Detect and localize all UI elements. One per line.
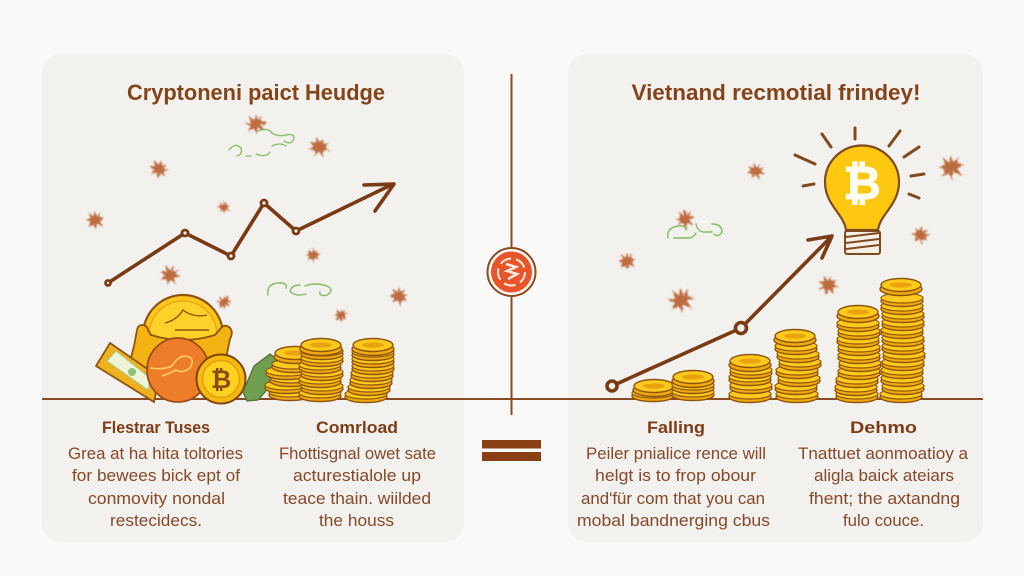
left coin stack 3 <box>345 338 394 402</box>
right coin stack 6 <box>880 278 925 402</box>
text block: left column 1: Flestrar Tuses <box>102 418 210 437</box>
large gold coin <box>131 295 232 375</box>
left trend line chart <box>106 184 394 286</box>
panel: right <box>568 54 983 542</box>
text block: right column 2: Dehmo <box>850 418 917 437</box>
icon: bitcoin light bulb <box>795 128 924 254</box>
text block: left column 1: restecidecs. <box>110 512 202 530</box>
right coin stack 4 <box>774 330 821 402</box>
text block: right column 2: fulo couce. <box>843 512 924 530</box>
text block: right column 2: Tnattuet aonmoatioy a <box>798 445 969 463</box>
banknote <box>96 343 159 402</box>
bitcoin coin: ₿ <box>211 366 231 394</box>
text block: left column 2 <box>279 418 436 530</box>
equals bars <box>482 440 541 461</box>
text block: right column 1: Falling <box>647 418 705 437</box>
text block: right column 1 <box>577 418 770 530</box>
text block: right column 1: and'für com that you can <box>581 490 765 508</box>
green banknote <box>243 354 287 401</box>
text block: right column 1: mobal bandnerging cbus <box>577 512 770 530</box>
text block: right column 2: fhent; the axtandng <box>809 490 960 508</box>
left coin stack 1 <box>265 346 316 400</box>
coin and banknote cluster <box>96 295 287 404</box>
green squiggle: right <box>668 224 722 238</box>
text block: left column 2: Fhottisgnal owet sate <box>279 445 436 463</box>
right coin stack 2 <box>672 370 714 400</box>
divider lines <box>42 74 983 415</box>
right coin stack 3 <box>729 354 772 402</box>
text block: left column 1: Grea at ha hita toltories <box>68 445 243 463</box>
decorative splatters: right <box>618 155 964 313</box>
text block: right column 2 <box>798 418 969 530</box>
text block: right column 1: helgt is to frop obour <box>595 467 757 485</box>
center emblem <box>488 248 536 296</box>
text block: right column 2: aligla baick ateiars <box>814 467 954 485</box>
panel: left <box>42 54 464 542</box>
text block: left column 2: acturestialole up <box>293 467 421 485</box>
right coin stack 5 <box>835 306 881 402</box>
right rising arrow <box>607 236 832 391</box>
bitcoin coin <box>196 354 246 404</box>
text block: left column 2: teace thain. wiilded <box>283 490 431 508</box>
text block: left column 1: conmovity nondal <box>88 490 225 508</box>
text block: left column 2: the houss <box>319 512 394 530</box>
green squiggle: top left <box>229 129 294 156</box>
left title: Cryptoneni paict Heudge <box>127 80 385 105</box>
green squiggle: middle left <box>268 283 331 296</box>
text block: left column 2: Comrload <box>316 418 398 437</box>
text block: right column 1: Peiler pnialice rence will <box>586 445 766 463</box>
right coin stack 1 <box>632 380 675 402</box>
right title: Vietnand recmotial frindey! <box>632 80 920 105</box>
text block: left column 1: for bewees bick ept of <box>72 467 240 485</box>
left coin stack 2 <box>299 338 343 402</box>
orange ball <box>147 338 209 402</box>
icon: bitcoin light bulb: ₿ <box>843 157 881 209</box>
decorative splatters: left <box>85 114 412 323</box>
text block: left column 1 <box>68 418 243 530</box>
